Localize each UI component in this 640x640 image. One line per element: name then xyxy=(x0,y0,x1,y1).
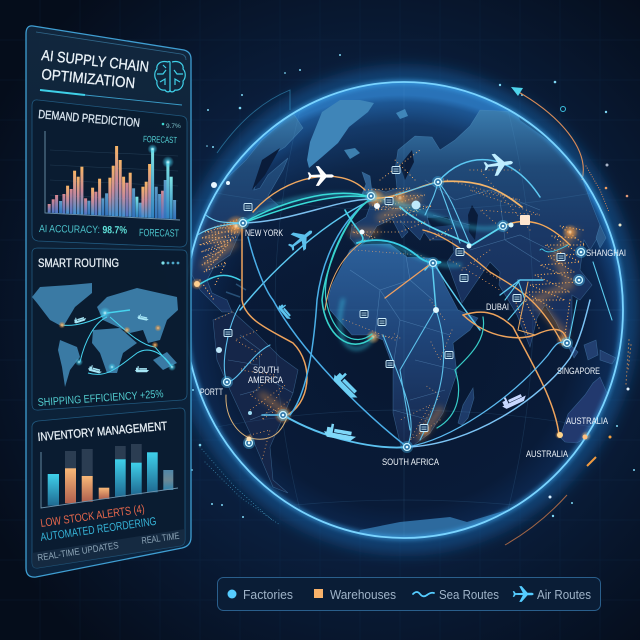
atmosphere glow xyxy=(179,76,629,544)
location labels: AUSTRALIA xyxy=(566,416,608,426)
mini world map xyxy=(32,283,178,387)
location labels: DUBAI xyxy=(486,302,509,312)
icon: ship Atlantic north xyxy=(331,368,364,401)
location labels: NEW YORK xyxy=(245,228,283,238)
pagination dots xyxy=(161,261,179,265)
icon: white plane over Atlantic xyxy=(308,166,334,186)
left dashboard panel xyxy=(26,26,191,577)
icon: blue plane xyxy=(284,223,318,256)
legend: air routes xyxy=(513,586,591,602)
location labels: AUSTRALIA xyxy=(526,449,568,459)
location labels: PORTT xyxy=(200,387,223,397)
africa xyxy=(328,244,478,448)
bar chart xyxy=(45,131,180,220)
icon: orbit arrow head xyxy=(511,87,523,96)
forecast label: FORECAST xyxy=(143,134,178,145)
heading: INVENTORY MANAGEMENT xyxy=(37,419,168,444)
location labels: SINGAPORE xyxy=(557,366,600,376)
icon: ship Indian Ocean xyxy=(499,389,527,410)
location labels: AMERICA xyxy=(248,375,283,385)
route glow xyxy=(243,195,505,349)
panel: smart routing xyxy=(32,248,187,410)
title underline xyxy=(40,90,182,105)
heading: DEMAND PREDICTION xyxy=(38,107,141,130)
routes xyxy=(190,160,612,448)
svalbard xyxy=(396,109,408,119)
heading: SMART ROUTING xyxy=(38,256,119,270)
icon: brain xyxy=(155,62,185,92)
badge: 9.7% xyxy=(166,123,181,130)
madagascar xyxy=(458,388,474,425)
indonesia xyxy=(565,340,616,364)
footer bar: REAL TIME xyxy=(141,531,180,547)
uk xyxy=(362,172,372,194)
forecast caption: FORECAST xyxy=(139,227,180,240)
starfield and orbital dots xyxy=(191,54,635,545)
accuracy stat: AI ACCURACY: 98.7% xyxy=(39,223,128,237)
location labels: SOUTH AFRICA xyxy=(382,457,439,467)
south america xyxy=(213,312,298,493)
iceland xyxy=(344,148,360,159)
inland seas xyxy=(252,117,548,240)
rim xyxy=(185,82,623,538)
legend xyxy=(218,578,600,610)
antarctica xyxy=(359,510,508,538)
legend: sea routes xyxy=(413,588,499,602)
globe xyxy=(185,82,623,560)
icon: ship Caribbean xyxy=(277,302,295,321)
efficiency stat: SHIPPING EFFICIENCY +25% xyxy=(37,388,164,409)
panel: inventory management xyxy=(32,408,185,568)
location labels xyxy=(200,228,626,467)
inventory bar chart xyxy=(41,444,178,508)
icon: plane over Asia xyxy=(483,151,514,177)
footer bar: REAL-TIME UPDATES xyxy=(37,540,119,564)
light hotspots xyxy=(191,188,591,444)
location labels: SOUTH xyxy=(253,365,279,375)
australia xyxy=(560,377,610,443)
north america xyxy=(192,113,303,312)
outer orbit arcs xyxy=(217,87,583,180)
low stock alert: LOW STOCK ALERTS (4) xyxy=(40,503,146,530)
legend: sea routes: Sea Routes xyxy=(439,588,499,602)
world map land masses xyxy=(192,100,616,560)
panel: demand prediction xyxy=(32,100,187,247)
eurasia xyxy=(350,110,602,347)
japan xyxy=(596,225,606,248)
country borders xyxy=(205,180,560,420)
location labels: SHANGHAI xyxy=(586,248,626,258)
atlantic air route orange xyxy=(253,176,365,212)
graticule xyxy=(192,106,620,522)
icon: ship Atlantic south xyxy=(323,423,358,442)
reordering note: AUTOMATED REORDERING xyxy=(40,516,157,544)
hub and warehouse markers xyxy=(194,166,588,453)
city lights xyxy=(199,150,585,460)
legend: factories: Factories xyxy=(243,588,293,602)
panel title: OPTIMIZATION xyxy=(41,66,136,92)
caribbean xyxy=(226,284,246,297)
panel title xyxy=(41,47,150,92)
footer bar xyxy=(32,529,185,568)
panel title: AI SUPPLY CHAIN xyxy=(41,47,150,76)
greenland xyxy=(307,100,374,168)
legend: air routes: Air Routes xyxy=(537,588,591,602)
legend: warehouses: Warehouses xyxy=(330,588,396,602)
